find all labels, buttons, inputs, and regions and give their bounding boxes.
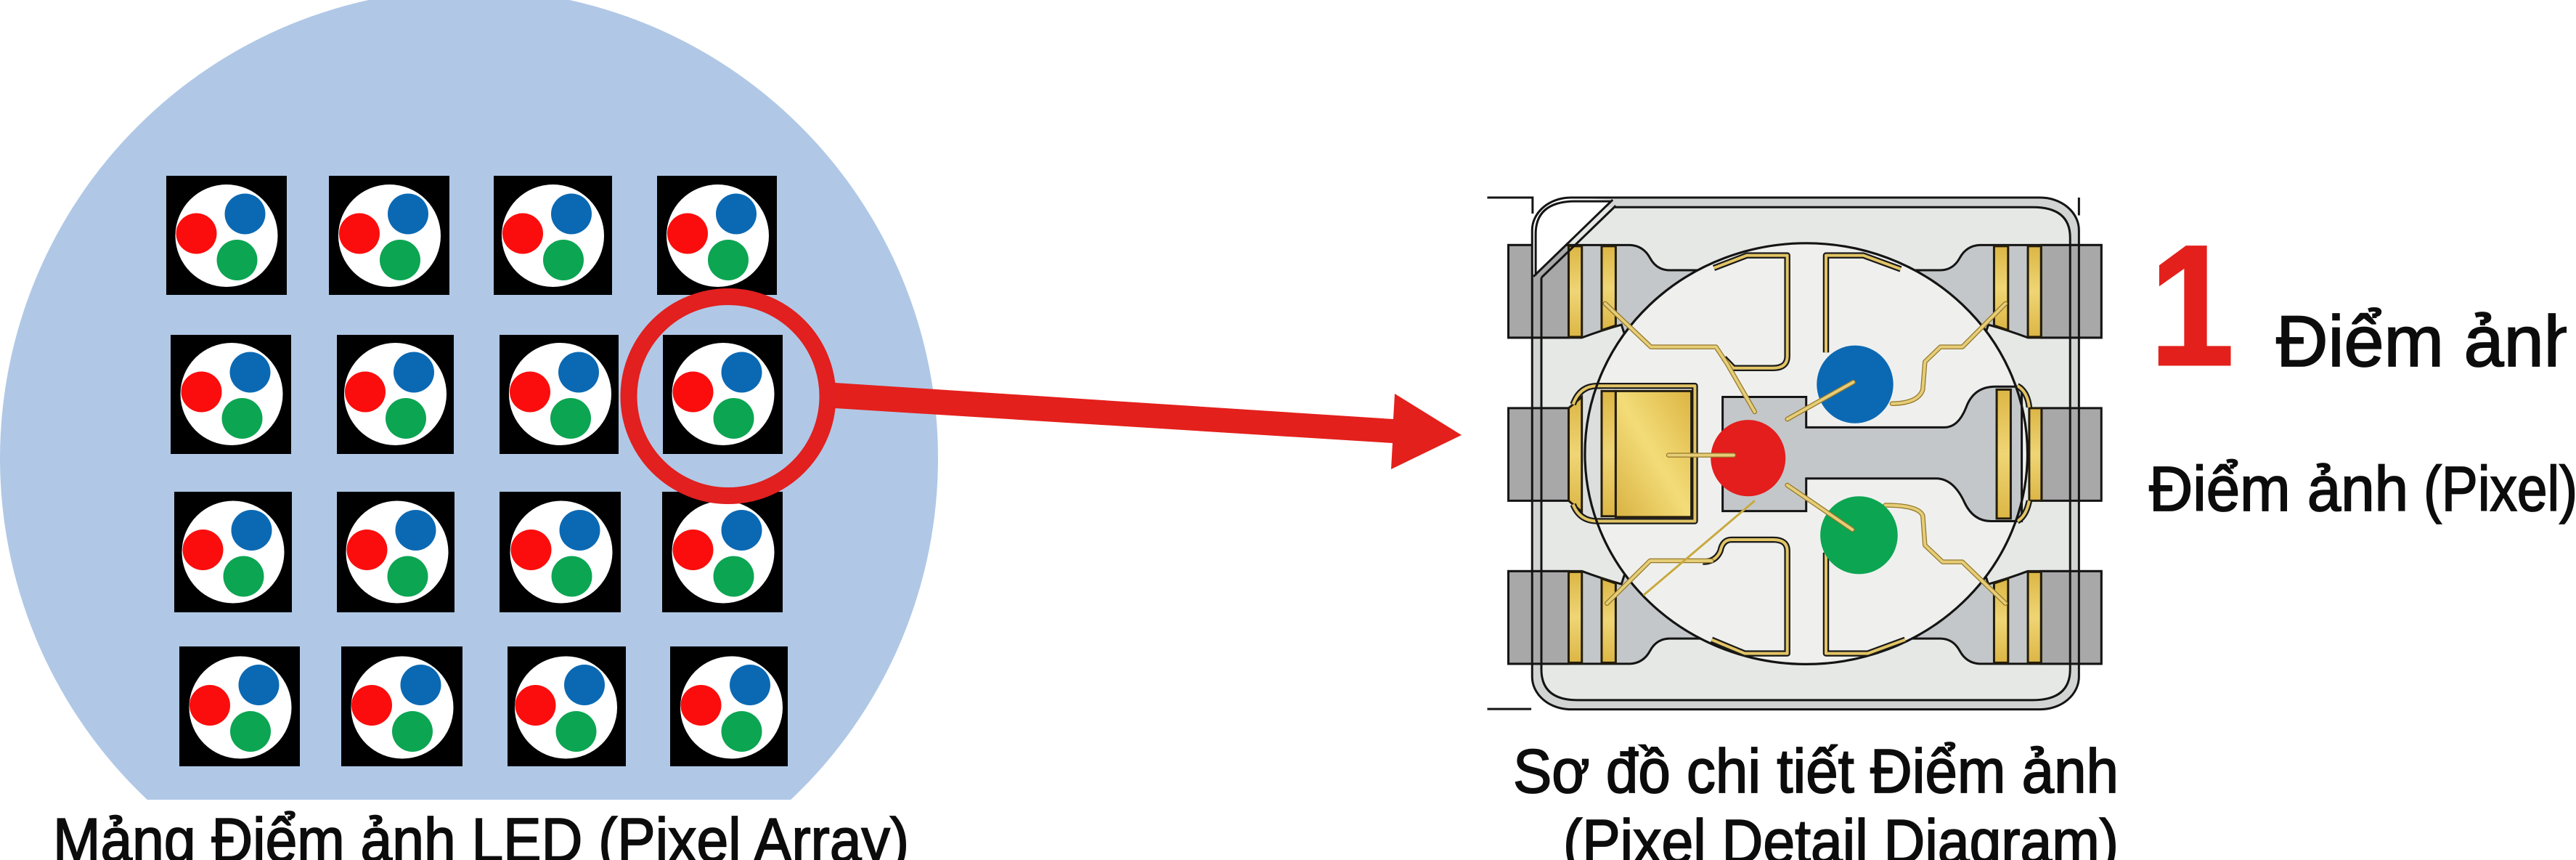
lens outline (1585, 243, 2027, 664)
pixel grid (166, 176, 788, 766)
pixel r2c2 (337, 335, 454, 454)
pixel r2c3 (500, 335, 619, 454)
pad outlines (1703, 256, 1905, 654)
pixel term: Điểm ảnh (2149, 454, 2408, 524)
pixel r1c1 (166, 176, 287, 295)
panel: LED pixel array wafer (0, 0, 938, 860)
arrow: array to detail (835, 383, 1462, 469)
lead bottom-left (1509, 564, 1725, 664)
LED: red (1711, 420, 1785, 496)
pixel r2c1 (171, 335, 291, 454)
pixel r3c1 (174, 492, 292, 612)
chamfered corner cut (1532, 198, 1613, 277)
pixel r1c3 (494, 176, 612, 295)
pixel r1c4 (657, 176, 777, 295)
lead bottom-right (1885, 564, 2101, 664)
lead top-left (1509, 245, 1725, 345)
lead top-right (1885, 245, 2101, 345)
pixel r3c4 (662, 492, 783, 612)
pixel r4c1 (179, 646, 300, 766)
diagram caption (1513, 737, 2119, 860)
pixel r4c2 (341, 646, 462, 766)
centre die pad and right lead (1723, 386, 2029, 521)
LED: green (1820, 496, 1898, 574)
LED: blue (1817, 346, 1894, 423)
package body (1532, 198, 2079, 710)
pin middle-left (1509, 397, 1582, 512)
step title: Điểm ảnh (2276, 301, 2576, 381)
pixel r3c3 (500, 492, 621, 612)
caption line 1: Sơ đồ chi tiết Điểm ảnh (1513, 737, 2119, 806)
pixel r3c2 (337, 492, 455, 612)
pixel r1c2 (329, 176, 449, 295)
highlight ring (629, 296, 828, 495)
die wires (1668, 382, 1854, 530)
pixel r4c3 (508, 646, 626, 766)
step number: 1 (2150, 210, 2234, 402)
pin middle-right (2029, 408, 2101, 500)
left die pad (1573, 386, 1695, 521)
pixel detail diagram (1487, 198, 2101, 710)
bond wires (1605, 304, 2005, 604)
pixel r4c4 (670, 646, 788, 766)
pixel term (2149, 454, 2576, 524)
package outline (1532, 198, 2079, 710)
dimension marks (1487, 198, 2079, 709)
pixel r2c4 (highlighted) (663, 335, 783, 454)
LED lens circle (1585, 243, 2027, 664)
